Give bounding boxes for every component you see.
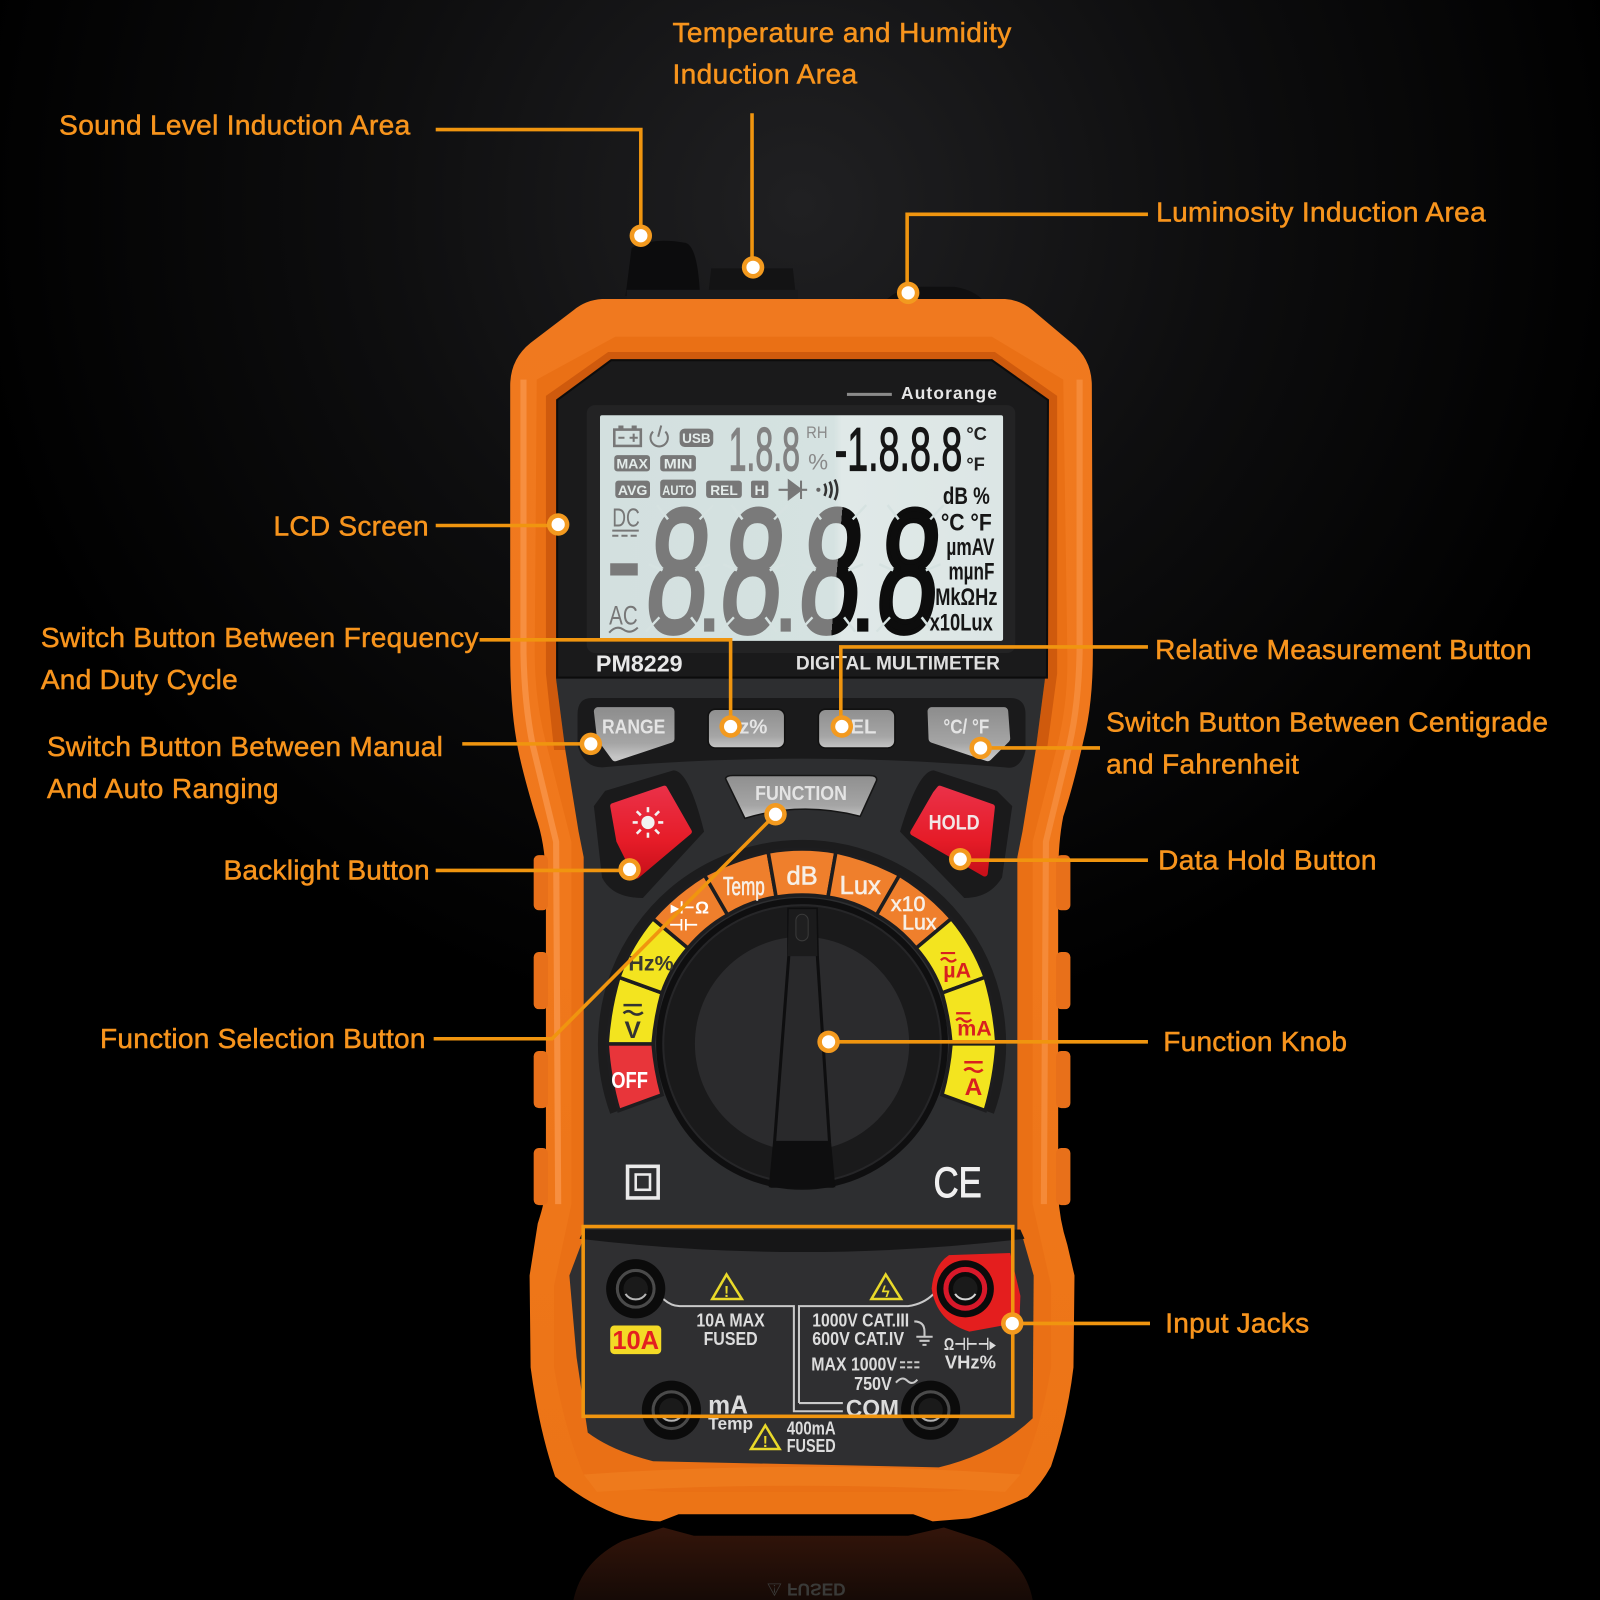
label: centigrade fahrenheit: Switch Button Between Centigrade [1106, 707, 1548, 738]
icon: sun [633, 807, 663, 838]
temperature units [966, 423, 987, 474]
reflection of the meter [573, 1528, 1033, 1600]
LCD status icons: MIN [664, 456, 692, 472]
10A badge: 10A [612, 1327, 659, 1355]
top sensors [626, 241, 985, 302]
temperature units: °F [966, 453, 985, 474]
dark face panel [556, 360, 1048, 1240]
label: data hold: Data Hold Button [1158, 844, 1377, 875]
RH percent units: RH [806, 424, 828, 442]
circuit traces [663, 1294, 934, 1411]
REL button: REL [836, 717, 877, 739]
mA jack [642, 1381, 701, 1440]
rotary selector band [607, 849, 997, 1111]
grip nubs [534, 855, 1070, 1205]
label: relative measurement [831, 634, 1532, 738]
label: centigrade fahrenheit: and Fahrenheit [1106, 748, 1299, 779]
label: centigrade fahrenheit [969, 707, 1548, 779]
HOLD button: HOLD [929, 811, 980, 835]
panel ratings: MAX 1000V [811, 1353, 898, 1374]
Autorange marking [847, 383, 997, 403]
LCD measurement units: dB % [943, 483, 990, 510]
LCD measurement units: °C °F [941, 510, 992, 537]
LCD measurement units: MkΩHz [935, 584, 997, 611]
voltage jack [937, 1260, 994, 1317]
LCD measurement units: µmAV [946, 534, 995, 561]
label: function knob: Function Knob [1163, 1026, 1347, 1057]
LCD status icons: AVG [618, 483, 647, 499]
main LCD digits: 8 [640, 474, 718, 670]
warning triangles [712, 1274, 901, 1449]
DC indicator [612, 505, 640, 536]
main LCD digits: 8 [793, 474, 871, 670]
panel ratings: FUSED [787, 1435, 836, 1456]
Hz% button: Hz% [724, 717, 767, 739]
amp segment: A [965, 1074, 983, 1101]
function knob [656, 898, 948, 1190]
dB segment: dB [786, 863, 818, 891]
LCD humidity digits: 1.8.8 [729, 415, 800, 483]
product name: DIGITAL MULTIMETER [796, 652, 1000, 674]
RH percent units: % [808, 449, 828, 474]
Hz percent segment: Hz% [628, 951, 674, 975]
multimeter [510, 241, 1093, 1521]
milliamp segment: mA [957, 1017, 992, 1041]
HOLD button [913, 789, 992, 873]
label: frequency duty cycle [41, 622, 742, 738]
FUNCTION button [726, 776, 877, 818]
Celsius Fahrenheit button [932, 711, 1006, 757]
diode ohm segment [653, 875, 728, 948]
jack panel [569, 1230, 1034, 1467]
dB segment [768, 849, 836, 897]
knob pointer [770, 909, 834, 1186]
label: function selection [100, 803, 787, 1054]
DC indicator: DC [612, 505, 640, 533]
label: temperature and humidity: Temperature and Humidity [672, 17, 1011, 48]
temperature units: °C [966, 423, 987, 444]
panel ratings: 1000V CAT.III [812, 1310, 909, 1331]
jack panel: ! [763, 1434, 768, 1451]
LCD screen [587, 405, 1015, 670]
Autorange marking: Autorange [901, 383, 997, 403]
microamp segment [916, 919, 985, 993]
label: relative measurement: Relative Measurement Button [1155, 634, 1532, 665]
RH percent units [806, 424, 828, 474]
OFF segment [607, 1044, 662, 1111]
label: sound level [59, 110, 652, 247]
main LCD digits [640, 474, 949, 670]
voltage segment: V [624, 1017, 641, 1044]
Hz% button [708, 709, 785, 748]
LCD status icons [614, 426, 837, 500]
COM jack [901, 1381, 960, 1440]
main LCD digits: 8 [870, 474, 949, 670]
LCD measurement units [930, 483, 997, 637]
LCD status icons: MAX [616, 456, 648, 472]
minus sign [610, 563, 638, 576]
label: luminosity: Luminosity Induction Area [1156, 196, 1486, 227]
model name: PM8229 [596, 650, 683, 676]
label: manual auto ranging [47, 731, 602, 804]
panel ratings: Temp [708, 1414, 753, 1434]
LCD status icons: H [755, 483, 765, 499]
jack panel: ! [724, 1284, 729, 1301]
LCD status icons: AUTO [662, 483, 694, 499]
main LCD digits: 8 [714, 474, 793, 670]
label: manual auto ranging: And Auto Ranging [47, 773, 279, 804]
RANGE button: RANGE [602, 717, 665, 739]
milliamp segment [942, 977, 997, 1044]
label: function knob [817, 1026, 1347, 1057]
Temp segment: Temp [723, 873, 765, 901]
10A jack [606, 1259, 665, 1318]
LCD temperature digits: -1.8.8.8 [835, 415, 962, 483]
AC indicator: AC [609, 600, 638, 630]
display bezel [557, 360, 1048, 678]
label: input jacks [1001, 1308, 1309, 1339]
panel ratings: COM [846, 1395, 899, 1422]
icon: double insulation [628, 1166, 658, 1198]
label: luminosity [897, 196, 1486, 304]
RANGE button [598, 711, 670, 757]
label: manual auto ranging: Switch Button Between Manual [47, 731, 443, 762]
panel ratings: 750V [854, 1373, 892, 1394]
panel ratings: 600V CAT.IV [812, 1328, 905, 1349]
panel ratings: 10A MAX [696, 1310, 765, 1331]
panel ratings: VHz% [945, 1351, 996, 1372]
x10 Lux segment [877, 875, 951, 948]
Lux segment [828, 852, 899, 915]
label: temperature and humidity [672, 17, 1011, 279]
label: temperature and humidity: Induction Area [672, 59, 858, 90]
panel ratings: mA [708, 1391, 748, 1419]
diode ohm segment: ⊣⊢ [669, 917, 699, 935]
FUNCTION button: FUNCTION [755, 783, 847, 805]
label: backlight [223, 855, 641, 886]
label: LCD screen [273, 511, 569, 542]
panel ratings: FUSED [704, 1328, 758, 1349]
diode ohm segment: ▸⊢Ω [671, 897, 709, 917]
backlight button well [594, 770, 704, 898]
red input shroud [932, 1253, 1020, 1332]
backlight button [613, 789, 689, 876]
label: data hold [949, 844, 1377, 875]
LCD status icons: USB [682, 431, 711, 447]
jack panel: ϟ [882, 1284, 890, 1301]
LCD measurement units: x10Lux [930, 610, 993, 637]
CE mark: CE [934, 1159, 982, 1207]
reflection of the meter: ⚠ FUSED [767, 1580, 846, 1600]
Hz percent segment [619, 919, 688, 993]
LCD measurement units: mµnF [948, 559, 994, 586]
input jacks highlight box [583, 1227, 1013, 1416]
Temp segment [705, 852, 776, 915]
microamp segment: µA [943, 959, 971, 983]
orange housing [510, 299, 1093, 1521]
x10 Lux segment: x10 [891, 892, 926, 916]
REL button [818, 709, 895, 748]
label: LCD screen: LCD Screen [273, 511, 429, 542]
label: function selection: Function Selection Button [100, 1023, 426, 1054]
label: frequency duty cycle: And Duty Cycle [41, 664, 238, 695]
amp segment [942, 1044, 997, 1111]
panel ratings: 400mA [787, 1418, 836, 1439]
x10 Lux segment: Lux [902, 911, 937, 935]
label: sound level: Sound Level Induction Area [59, 110, 411, 141]
upper button well [578, 698, 1026, 768]
label: input jacks: Input Jacks [1165, 1308, 1309, 1339]
LCD status icons: REL [710, 483, 738, 499]
voltage segment [607, 977, 662, 1044]
label: frequency duty cycle: Switch Button Between Frequency [41, 622, 479, 653]
panel symbols [896, 1321, 933, 1383]
label: backlight: Backlight Button [223, 855, 430, 886]
Celsius Fahrenheit button: °C/ °F [943, 717, 989, 739]
hold button well [900, 770, 1012, 898]
Lux segment: Lux [840, 872, 881, 900]
panel ratings: Ω⊣⊢⊣▸ [944, 1334, 996, 1354]
OFF segment: OFF [611, 1067, 648, 1093]
panel ratings [696, 1310, 996, 1456]
